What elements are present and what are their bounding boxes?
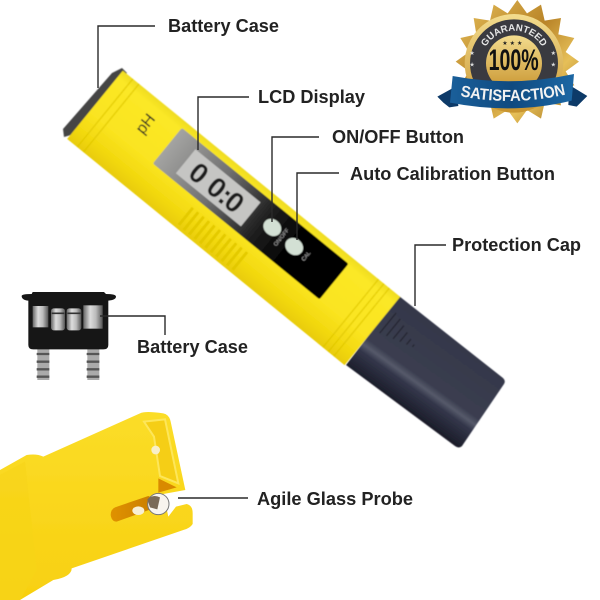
label: auto calibration button: [297, 164, 555, 240]
label: battery case top: Battery Case: [168, 16, 279, 36]
CAL caption: CAL: [301, 251, 312, 263]
case frame: [22, 292, 116, 349]
label: protection cap: [415, 235, 581, 306]
label: ON/OFF button: [272, 127, 464, 222]
probe close-up: [0, 412, 193, 600]
satisfaction badge: [438, 0, 588, 124]
stars: ★★★: [502, 40, 524, 47]
gold star seal: [456, 0, 579, 123]
label: battery case lower: Battery Case: [137, 337, 248, 357]
LCD digits: 00:0: [183, 156, 250, 219]
dark ring: [470, 19, 558, 107]
spring contact right: [87, 347, 99, 380]
battery case photo: [22, 292, 116, 380]
control panel: [153, 128, 349, 299]
glass bulb: [147, 493, 169, 515]
label: battery case lower: [100, 316, 248, 357]
100 percent: 100%: [489, 44, 539, 77]
protection cap: [346, 296, 505, 448]
ring stars: ★: [551, 62, 556, 69]
ring stars: ★: [469, 50, 475, 57]
guaranteed arc text: GUARANTEED: [482, 24, 546, 46]
ribbon: [438, 74, 588, 108]
label: agile glass probe: Agile Glass Probe: [257, 489, 413, 509]
satisfaction text: SATISFACTION: [461, 84, 565, 101]
label: auto calibration button: Auto Calibration Button: [350, 164, 555, 184]
pH label: pH: [133, 111, 159, 138]
CAL button: [282, 234, 307, 259]
label: battery case top: [98, 16, 279, 88]
pH meter pen: [63, 68, 505, 448]
label: ON/OFF button: ON/OFF Button: [332, 127, 464, 147]
probe slot: [111, 496, 157, 522]
spring contact left: [37, 347, 49, 380]
batteries: [33, 305, 103, 330]
label: LCD display: LCD Display: [258, 87, 365, 107]
ring stars: ★: [551, 50, 556, 57]
ON/OFF button: [260, 215, 285, 240]
ring stars: ★: [469, 62, 475, 69]
yellow probe housing: [0, 412, 193, 600]
grip ridges: [178, 208, 247, 270]
sensor window: [144, 419, 178, 483]
yellow pen body: [67, 71, 400, 365]
battery end cover: [63, 68, 127, 137]
label: protection cap: Protection Cap: [452, 235, 581, 255]
label: LCD display: [198, 87, 365, 150]
LCD screen: [175, 149, 261, 227]
ON/OFF caption: ON/OFF: [273, 227, 291, 248]
